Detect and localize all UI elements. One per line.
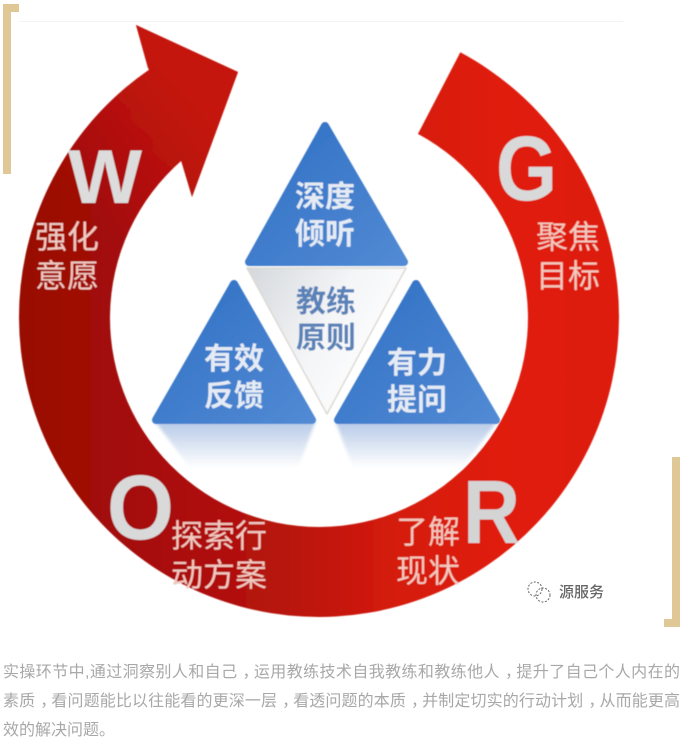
- label: 了解现状: 了解: [396, 514, 460, 550]
- left blue triangle: 有效反馈: [156, 284, 312, 420]
- label: 强化意愿: 强化: [35, 219, 99, 255]
- top blue triangle: 深度倾听: [249, 126, 404, 262]
- center label: 教练原则: [296, 286, 356, 355]
- label: 聚焦目标: 聚焦: [536, 219, 600, 255]
- letter W: W: [68, 135, 142, 220]
- label: 探索行动方案: 探索行: [171, 518, 267, 554]
- caption paragraph: 素质 ，看问题能比以往能看的更深一层 ，看透问题的本质 ，并制定切实的行动计划 ，从而能更高: [3, 692, 680, 710]
- label: 了解现状: 现状: [396, 553, 460, 589]
- decorative bracket: bottom right: [664, 457, 680, 627]
- label: 聚焦目标: 目标: [536, 258, 600, 294]
- caption paragraph: 实操环节中,通过洞察别人和自己 ，运用教练技术自我教练和教练他人 ，提升了自己个人内在的: [3, 663, 680, 681]
- label: 探索行动方案: [171, 518, 267, 593]
- center label: 教练原则: 原则: [296, 322, 356, 355]
- right blue triangle: 有力提问: 有力: [387, 347, 447, 380]
- caption paragraph: [3, 663, 680, 739]
- label: 聚焦目标: [536, 219, 600, 294]
- label: 强化意愿: [35, 219, 99, 294]
- top blue triangle: 深度倾听: 深度: [295, 181, 355, 214]
- label: 强化意愿: 意愿: [35, 258, 99, 294]
- letter R: R: [463, 463, 520, 563]
- right blue triangle: 有力提问: 提问: [387, 384, 447, 417]
- watermark: [528, 582, 604, 602]
- reflection under lower triangles: [154, 420, 498, 468]
- letter O: O: [107, 457, 174, 559]
- center label: 教练原则: 教练: [296, 286, 356, 319]
- left blue triangle: 有效反馈: 有效: [204, 343, 264, 376]
- arrow head highlight: [58, 24, 238, 222]
- center inverted triangle: [247, 268, 406, 414]
- GROW cycle diagram: [19, 25, 619, 617]
- top blue triangle: 深度倾听: 倾听: [295, 218, 355, 251]
- label: 了解现状: [396, 514, 460, 589]
- icon: wechat bubbles: [528, 582, 550, 602]
- left blue triangle: 有效反馈: 反馈: [204, 380, 264, 413]
- decorative bracket: top left: [3, 4, 19, 174]
- top divider line: [19, 21, 623, 22]
- caption paragraph: 效的解决问题。: [3, 721, 115, 739]
- watermark text: 源服务: [559, 584, 604, 601]
- right blue triangle: 有力提问: [338, 284, 496, 420]
- red circular arrow ring: [19, 25, 619, 617]
- label: 探索行动方案: 动方案: [171, 557, 267, 593]
- letter G: G: [496, 118, 557, 220]
